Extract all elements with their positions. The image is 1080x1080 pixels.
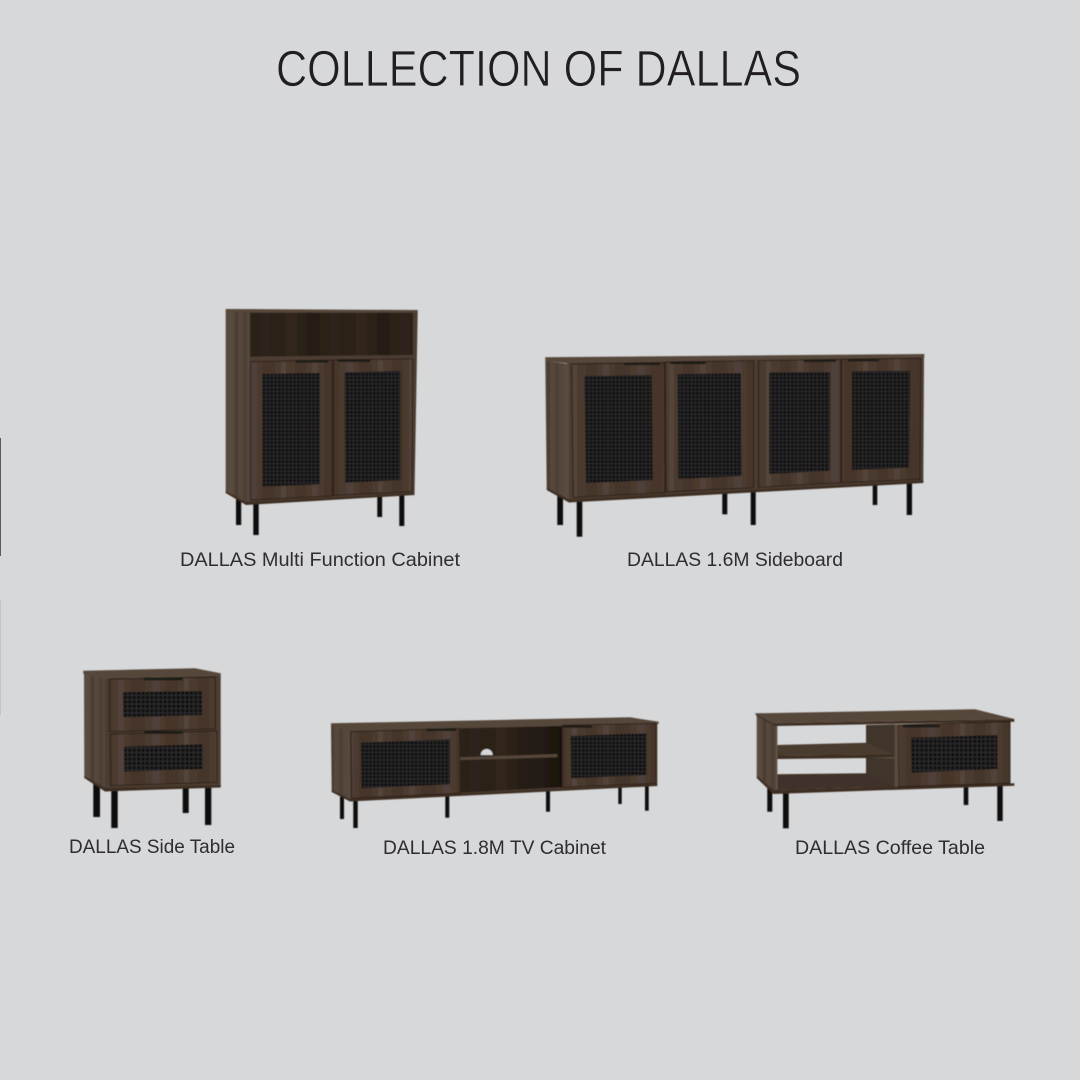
sideboard door 4 [842, 358, 921, 483]
sideboard door 1 [572, 362, 665, 497]
tv cabinet door right [562, 723, 656, 787]
label: tv cabinet: DALLAS 1.8M TV Cabinet [383, 838, 607, 859]
label: multi function cabinet: DALLAS Multi Function Cabinet [180, 550, 461, 571]
coffee table top [755, 709, 1014, 726]
sideboard legs [557, 481, 912, 537]
cabinet legs [236, 494, 404, 535]
side table body [83, 668, 221, 792]
product: coffee table [755, 709, 1014, 828]
title: COLLECTION OF DALLAS [276, 40, 801, 97]
coffee table back panels [866, 724, 895, 789]
cabinet door left [251, 360, 332, 500]
tv cabinet door left [351, 728, 460, 798]
sideboard door 2 [665, 361, 754, 492]
cabinet body [226, 309, 418, 505]
label: coffee table: DALLAS Coffee Table [795, 838, 985, 859]
product: multi function cabinet [226, 309, 418, 535]
cabinet door right [333, 359, 413, 495]
sideboard door 3 [758, 359, 841, 487]
sideboard body [545, 354, 924, 502]
coffee table divider [894, 724, 899, 787]
product: tv cabinet [331, 717, 659, 828]
product: sideboard [545, 354, 924, 537]
label: side table: DALLAS Side Table [69, 837, 235, 858]
tv cabinet open shelf [460, 726, 562, 793]
coffee table shelves [777, 743, 895, 790]
tv cabinet legs [340, 785, 649, 828]
side table drawer top [109, 677, 215, 732]
coffee table legs [767, 785, 1003, 828]
side table drawer bottom [110, 731, 217, 786]
coffee table drawer [898, 722, 1010, 787]
tv cabinet body [331, 717, 659, 802]
coffee table left side [757, 716, 777, 792]
side table legs [93, 784, 211, 828]
label: sideboard: DALLAS 1.6M Sideboard [627, 550, 843, 571]
coffee table base [757, 775, 1014, 794]
product: side table [83, 668, 221, 828]
